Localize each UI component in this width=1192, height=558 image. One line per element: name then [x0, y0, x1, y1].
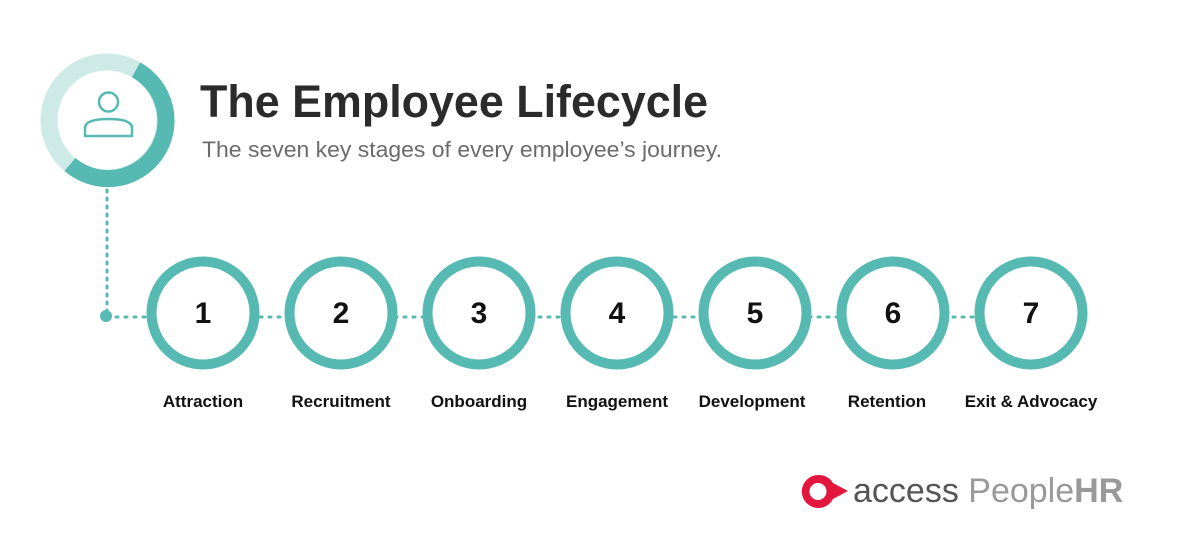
- stage 4: 4: [609, 297, 626, 330]
- stage 2: 2: [333, 297, 349, 330]
- stage 3: Onboarding: [431, 392, 527, 411]
- stage 4: Engagement: [566, 392, 668, 411]
- stage 4: [566, 262, 668, 411]
- stage 5: 5: [747, 297, 763, 330]
- stage 6: Retention: [848, 392, 926, 411]
- icon: person ring: [49, 62, 166, 179]
- stage 1: 1: [195, 297, 211, 330]
- stage 3: 3: [471, 297, 487, 330]
- subtitle: The seven key stages of every employee’s journey.: [202, 137, 722, 162]
- stage 7: Exit & Advocacy: [965, 392, 1098, 411]
- stage 2: [290, 262, 392, 411]
- stage 3: [428, 262, 530, 411]
- stage 5: Development: [699, 392, 806, 411]
- stages: [152, 262, 1098, 411]
- logo: access PeopleHR: [853, 472, 1123, 510]
- stage 2: Recruitment: [291, 392, 391, 411]
- connector start dot: [100, 310, 112, 322]
- connector: horizontal dotted line: [107, 316, 1030, 318]
- stage 6: 6: [885, 297, 901, 330]
- stage 7: [965, 262, 1098, 411]
- stage 1: [152, 262, 254, 411]
- connector: vertical dotted line: [106, 190, 108, 325]
- stage 6: [842, 262, 944, 411]
- stage 5: [699, 262, 806, 411]
- title: The Employee Lifecycle: [200, 76, 708, 127]
- stage 1: Attraction: [163, 392, 243, 411]
- stage 7: 7: [1023, 297, 1039, 330]
